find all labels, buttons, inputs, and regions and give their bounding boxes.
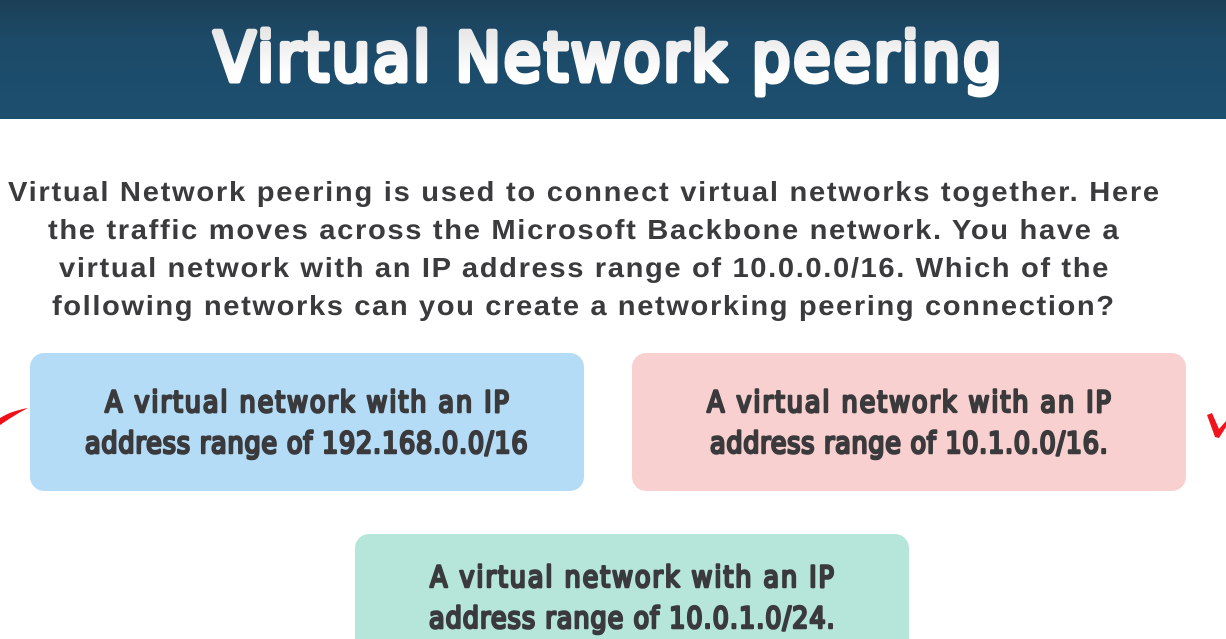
panel: option pink — [632, 353, 1186, 491]
panel: option green: address range of 10.0.1.0/24. — [429, 603, 835, 635]
panel: option blue — [30, 353, 584, 491]
icon: red cross stroke — [0, 408, 28, 425]
question text: virtual network with an IP address range of 10.0.0.0/16. Which of the — [59, 253, 1108, 284]
icon: red check mark — [1207, 413, 1226, 438]
question text: the traffic moves across the Microsoft Backbone network. You have a — [48, 215, 1119, 246]
title: Virtual Network peering — [214, 20, 1002, 97]
panel: option pink: address range of 10.1.0.0/16. — [710, 428, 1108, 460]
question text: Virtual Network peering is used to connect virtual networks together. Here — [8, 177, 1159, 208]
panel: option green — [355, 534, 909, 639]
panel: option pink: A virtual network with an IP — [707, 387, 1111, 419]
panel: option blue: A virtual network with an IP — [105, 387, 509, 419]
question text — [8, 177, 1159, 322]
header banner — [0, 0, 1226, 119]
question text: following networks can you create a networking peering connection? — [52, 291, 1114, 322]
panel: option green: A virtual network with an IP — [430, 562, 834, 594]
panel: option blue: address range of 192.168.0.0/16 — [85, 428, 528, 460]
